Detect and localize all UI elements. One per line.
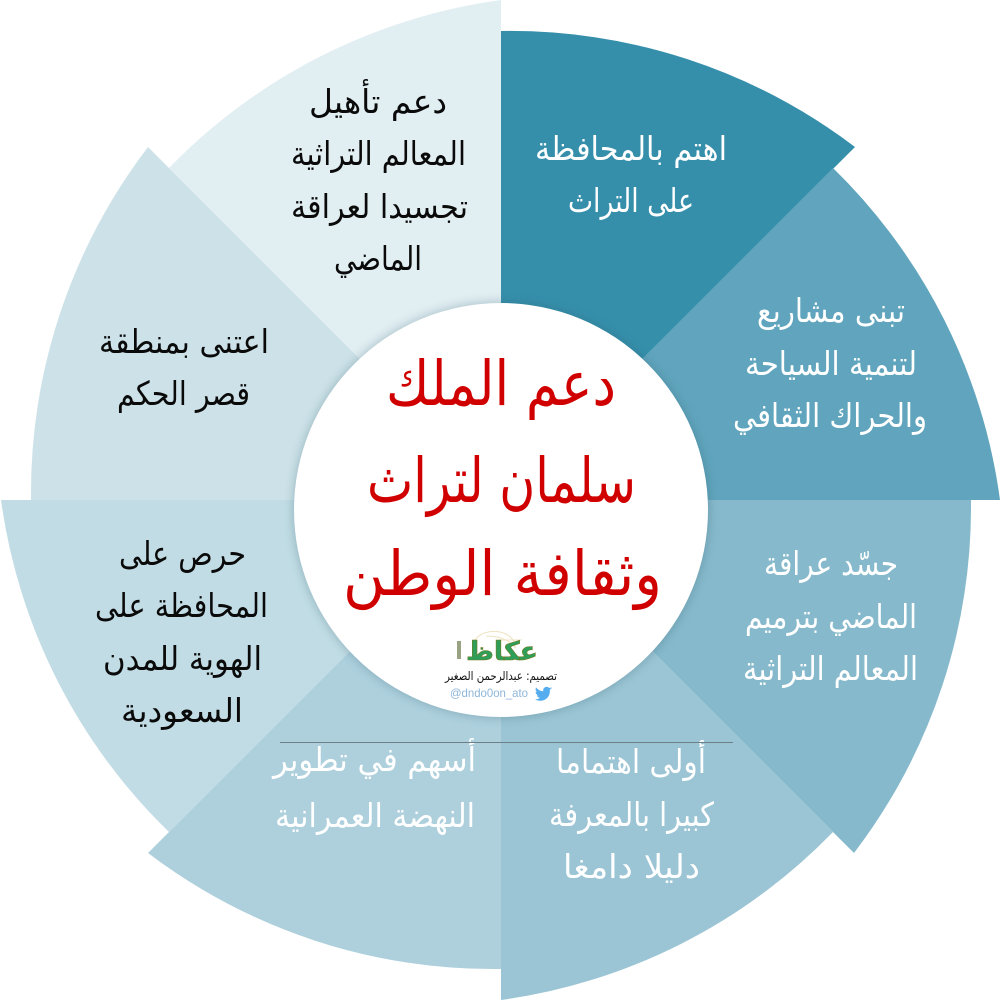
text: sector 2: والحراك الثقافي xyxy=(733,396,927,435)
panel: sector 7 Qasr Al Hokm xyxy=(31,147,501,500)
logo: Okaz: عكاظ xyxy=(466,637,538,667)
text: sector 3 xyxy=(743,544,918,688)
twitter handle: @dndo0on_ato xyxy=(450,686,528,700)
text: sector 6: الهوية للمدن xyxy=(103,639,262,678)
text: sector 8: المعالم التراثية xyxy=(291,134,466,173)
panel: sector 8 rehabilitating landmarks xyxy=(169,0,501,500)
text: sector 1: اهتم بالمحافظة xyxy=(535,129,727,168)
panel: sector 1 heritage preservation xyxy=(501,31,855,500)
text: sector 8: تجسيدا لعراقة xyxy=(291,187,468,226)
text: sector 6: حرص على xyxy=(119,534,246,574)
panel: center circle xyxy=(293,302,709,718)
text: sector 1 xyxy=(535,129,727,220)
text: sector 8: دعم تأهيل xyxy=(309,79,447,121)
text: sector 6: السعودية xyxy=(121,691,243,730)
text: sector 3: المعالم التراثية xyxy=(743,649,918,688)
title: سلمان لتراث xyxy=(367,444,636,517)
text: sector 2 xyxy=(733,291,927,435)
icon: twitter bird xyxy=(535,687,552,701)
panel: sector 4 knowledge xyxy=(501,500,833,1000)
title: دعم الملك xyxy=(386,347,616,420)
text: sector 3: جسّد عراقة xyxy=(764,544,898,583)
title xyxy=(343,347,662,610)
text: sector 7: قصر الحكم xyxy=(117,374,250,413)
text: sector 4: دليلا دامغا xyxy=(563,847,700,886)
text: sector 4 xyxy=(549,740,714,886)
text: sector 5: أسهم في تطوير xyxy=(271,738,476,779)
text: sector 3: الماضي بترميم xyxy=(745,597,917,636)
text: sector 4: أولى اهتماما xyxy=(556,740,706,781)
text: sector 7 xyxy=(99,322,269,413)
panel: sector 5 urban renaissance xyxy=(148,500,501,969)
panel: sector 6 city identity xyxy=(1,500,501,832)
text: sector 8: الماضي xyxy=(334,239,422,278)
text: sector 2: تبنى مشاريع xyxy=(757,291,905,330)
text: sector 6 xyxy=(95,534,268,730)
text: sector 7: اعتنى بمنطقة xyxy=(99,322,269,361)
text: sector 4: كبيرا بالمعرفة xyxy=(549,795,714,834)
panel: sector 3 restoring landmarks xyxy=(501,500,971,853)
panel: sector 2 tourism projects xyxy=(501,168,1000,500)
title: وثقافة الوطن xyxy=(343,537,662,610)
designer credit: تصميم: عبدالرحمن الصغير xyxy=(444,669,557,684)
text: sector 8 xyxy=(291,79,468,278)
text: sector 6: المحافظة على xyxy=(95,586,268,625)
text: sector 2: لتنمية السياحة xyxy=(745,344,917,383)
text: sector 5: النهضة العمرانية xyxy=(275,796,475,835)
text: sector 5 xyxy=(271,738,476,835)
text: sector 1: على التراث xyxy=(568,181,694,220)
